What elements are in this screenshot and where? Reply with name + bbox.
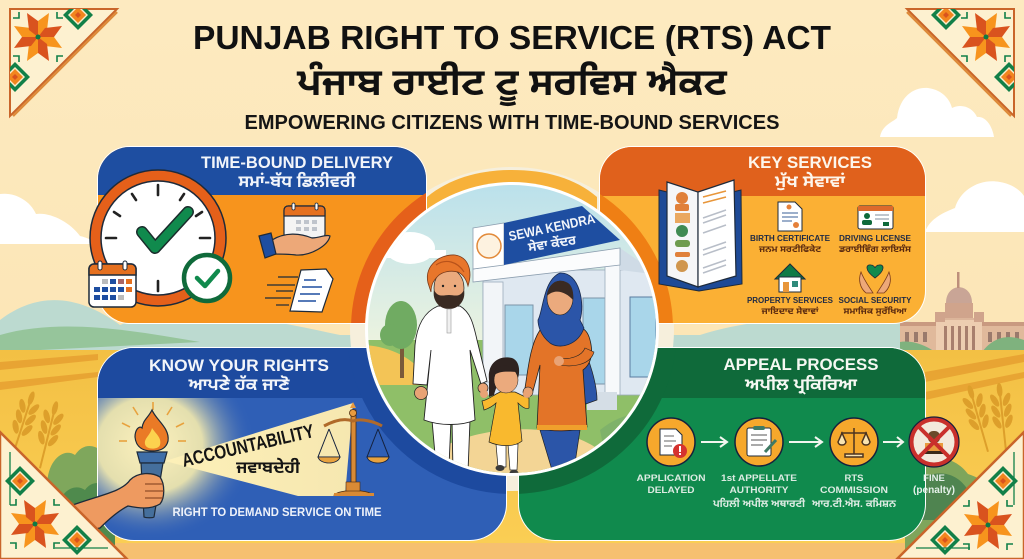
arrow <box>883 437 903 447</box>
arrow <box>789 437 822 447</box>
icon: hand holding torch <box>70 474 164 530</box>
step: RTS commission: RTS <box>844 473 864 484</box>
corner ornament: bottom left <box>0 432 127 559</box>
heading: KEY SERVICES <box>748 153 872 172</box>
child in yellow kurta <box>480 357 531 476</box>
heading in Punjabi: ਮੁੱਖ ਸੇਵਾਵਾਂ <box>774 171 846 191</box>
corner ornament: bottom right <box>897 432 1024 559</box>
Sewa Kendra building <box>473 206 663 410</box>
corner ornament: top left <box>9 8 120 118</box>
sky <box>368 185 651 340</box>
icon: speeding document <box>265 269 333 312</box>
man in orange turban <box>413 255 488 472</box>
heading: KNOW YOUR RIGHTS <box>149 356 329 375</box>
step: first appellate authority: ਪਹਿਲੀ ਅਪੀਲ ਅਥਾਰਟੀ <box>712 499 806 510</box>
icon: driving license card <box>858 206 893 229</box>
clouds <box>0 88 1024 244</box>
icon: open book <box>659 180 742 291</box>
step: fine penalty: (penalty) <box>913 485 955 496</box>
wheat fields <box>0 350 1024 559</box>
label: birth certificate: BIRTH CERTIFICATE <box>750 234 831 243</box>
icon: hand holding calendar <box>259 203 330 258</box>
step: fine penalty: FINE <box>923 473 945 484</box>
label: driving license: DRIVING LICENSE <box>839 234 912 243</box>
panel: time-bound delivery <box>88 146 427 324</box>
label: driving license <box>838 234 912 254</box>
Sewa Kendra building: SEWA KENDRA <box>507 211 597 244</box>
label: birth certificate <box>750 234 831 254</box>
heading: APPEAL PROCESS <box>724 355 878 374</box>
subtitle: EMPOWERING CITIZENS WITH TIME-BOUND SERVICES <box>244 112 780 134</box>
step: RTS commission: ਆਰ.ਟੀ.ਐਸ. ਕਮਿਸ਼ਨ <box>811 499 896 510</box>
step: fine penalty <box>909 417 959 496</box>
heading in Punjabi: ਸਮਾਂ-ਬੱਧ ਡਿਲੀਵਰੀ <box>238 171 356 191</box>
label: social security <box>838 296 912 317</box>
title in Punjabi: ਪੰਜਾਬ ਰਾਈਟ ਟੂ ਸਰਵਿਸ ਐਕਟ <box>296 60 728 107</box>
central circle: family at Sewa Kendra <box>360 180 664 480</box>
heading in Punjabi: ਆਪਣੇ ਹੱਕ ਜਾਣੋ <box>187 374 290 394</box>
icon: hands with heart <box>860 265 890 293</box>
icon: house <box>775 264 805 292</box>
icon: justice scale <box>318 402 389 496</box>
light beam <box>165 403 353 496</box>
step: RTS commission: COMMISSION <box>820 485 888 496</box>
woman in orange suit <box>523 273 597 470</box>
step: first appellate authority <box>712 418 806 510</box>
label: property services: ਜਾਇਦਾਦ ਸੇਵਾਵਾਂ <box>760 304 819 316</box>
icon: calendar <box>89 261 136 307</box>
fields and ground <box>368 340 656 473</box>
step: application delayed: APPLICATION <box>636 473 706 484</box>
step: application delayed: DELAYED <box>648 485 695 496</box>
icon: certificate <box>778 202 802 231</box>
icon: torch <box>119 402 186 518</box>
icon: clock with check <box>90 170 226 306</box>
label: social security: SOCIAL SECURITY <box>838 296 912 305</box>
label: driving license: ਡਰਾਈਵਿੰਗ ਲਾਇਸੰਸ <box>838 243 911 254</box>
heading: TIME-BOUND DELIVERY <box>201 154 393 172</box>
label: birth certificate: ਜਨਮ ਸਰਟੀਫਿਕੇਟ <box>758 242 821 254</box>
step: application delayed <box>636 418 706 496</box>
heading in Punjabi: ਅਪੀਲ ਪ੍ਰਕਿਰਿਆ <box>744 374 858 395</box>
step: first appellate authority: 1st APPELLATE <box>721 473 797 484</box>
title: PUNJAB RIGHT TO SERVICE (RTS) ACT <box>193 19 831 56</box>
palace <box>900 272 1024 352</box>
label: property services <box>747 296 834 316</box>
accountability in Punjabi: ਜਵਾਬਦੇਹੀ <box>235 457 301 477</box>
icon: check badge <box>184 255 230 301</box>
ring behind central circle <box>350 167 674 491</box>
panel: key services <box>599 146 926 324</box>
caption: RIGHT TO DEMAND SERVICE ON TIME <box>172 507 382 519</box>
panel: appeal process <box>518 347 960 541</box>
tree <box>380 301 417 378</box>
arrow <box>701 437 727 447</box>
label: property services: PROPERTY SERVICES <box>747 296 834 305</box>
Sewa Kendra building: ਸੇਵਾ ਕੇਂਦਰ <box>526 232 578 255</box>
corner ornament: top right <box>904 8 1015 118</box>
step: RTS commission <box>811 418 896 510</box>
step: first appellate authority: AUTHORITY <box>730 485 789 496</box>
label: social security: ਸਮਾਜਿਕ ਸੁਰੱਖਿਆ <box>842 305 907 317</box>
panel: know your rights <box>74 347 507 541</box>
accountability label: ACCOUNTABILITY <box>180 421 316 472</box>
top arch between panels <box>427 170 597 210</box>
